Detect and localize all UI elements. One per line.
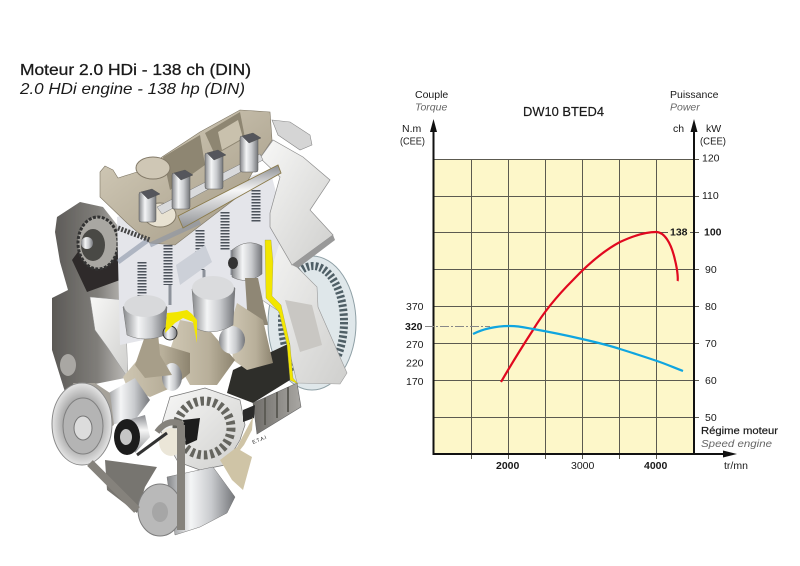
tensioner — [114, 415, 150, 455]
plot background — [434, 160, 694, 454]
flywheel — [268, 256, 356, 390]
oil cap — [136, 157, 170, 179]
left axis labels — [400, 89, 448, 388]
right axis labels: 138 — [670, 226, 688, 238]
crankshaft webs — [123, 303, 273, 397]
left axis labels: 320 — [405, 321, 423, 333]
valve gear — [118, 190, 256, 320]
right axis labels: 50 — [705, 412, 717, 424]
timing cover — [52, 202, 128, 392]
injectors — [139, 133, 261, 222]
oil duct yellow — [265, 240, 298, 384]
title — [19, 62, 251, 98]
head interior — [117, 170, 285, 345]
timing chain — [118, 228, 150, 240]
engine illustration — [52, 110, 356, 536]
alternator — [159, 388, 255, 470]
right axis arrow — [693, 125, 695, 455]
intake manifold — [260, 140, 333, 265]
right axis labels: 90 — [705, 264, 717, 276]
right axis labels: kW — [706, 123, 721, 135]
dark sump — [227, 343, 290, 403]
camshaft — [178, 165, 281, 228]
left axis labels: Couple — [415, 89, 448, 101]
left axis labels: 220 — [406, 358, 424, 370]
cover bolt — [60, 354, 76, 376]
chart: torque and power curves — [425, 119, 737, 459]
front pistons — [123, 276, 235, 340]
grid lines — [434, 160, 699, 459]
torque curve — [473, 326, 683, 371]
x axis labels: 4000 — [644, 460, 668, 472]
right axis labels: 80 — [705, 301, 717, 313]
title: 2.0 HDi engine - 138 hp (DIN) — [19, 81, 245, 98]
right axis labels: ch — [673, 123, 684, 135]
fuel rail — [157, 154, 263, 214]
cam gear — [78, 217, 118, 269]
oil pan — [253, 383, 301, 434]
left axis labels: N.m — [402, 123, 422, 135]
crank journals — [219, 326, 245, 354]
right axis labels: 100 — [704, 226, 722, 238]
right axis labels: 110 — [702, 190, 719, 202]
left axis labels: 370 — [406, 301, 424, 313]
lower block — [105, 460, 157, 513]
right axis labels: Puissance — [670, 89, 719, 101]
left axis labels: 270 — [406, 339, 424, 351]
x axis labels — [496, 425, 779, 472]
left axis labels: (CEE) — [400, 136, 425, 148]
left axis arrow — [432, 125, 434, 455]
signature: E.T.A.I — [252, 435, 267, 446]
x axis labels: Régime moteur — [701, 425, 779, 437]
x axis labels: 2000 — [496, 460, 520, 472]
mount bracket — [220, 417, 253, 490]
bottom axis arrow — [433, 453, 726, 455]
title: Moteur 2.0 HDi - 138 ch (DIN) — [20, 62, 251, 79]
outlet flange — [292, 235, 335, 268]
block — [262, 217, 347, 384]
oil channel in crank — [165, 310, 197, 343]
right axis labels — [670, 89, 726, 424]
right axis labels: (CEE) — [700, 136, 726, 148]
left axis labels: Torque — [415, 102, 447, 114]
torque reference line — [425, 326, 490, 328]
left axis labels: 170 — [406, 376, 424, 388]
valve cover — [100, 110, 272, 245]
right axis labels: 60 — [705, 375, 717, 387]
lower front cover — [90, 297, 128, 378]
connecting rods — [135, 333, 172, 378]
crank pulley — [52, 383, 114, 465]
x axis labels: Speed engine — [701, 438, 772, 450]
label gap on grid line — [668, 226, 690, 238]
x axis labels: tr/mn — [724, 460, 748, 472]
right axis labels: 120 — [702, 152, 720, 164]
ac compressor — [138, 467, 235, 536]
chart title: DW10 BTED4 — [523, 104, 604, 119]
x axis labels: 3000 — [571, 460, 595, 472]
right axis labels: Power — [670, 102, 700, 114]
power curve — [501, 232, 678, 382]
rear piston — [228, 243, 268, 325]
belt — [90, 422, 183, 530]
right axis labels: 70 — [705, 338, 717, 350]
